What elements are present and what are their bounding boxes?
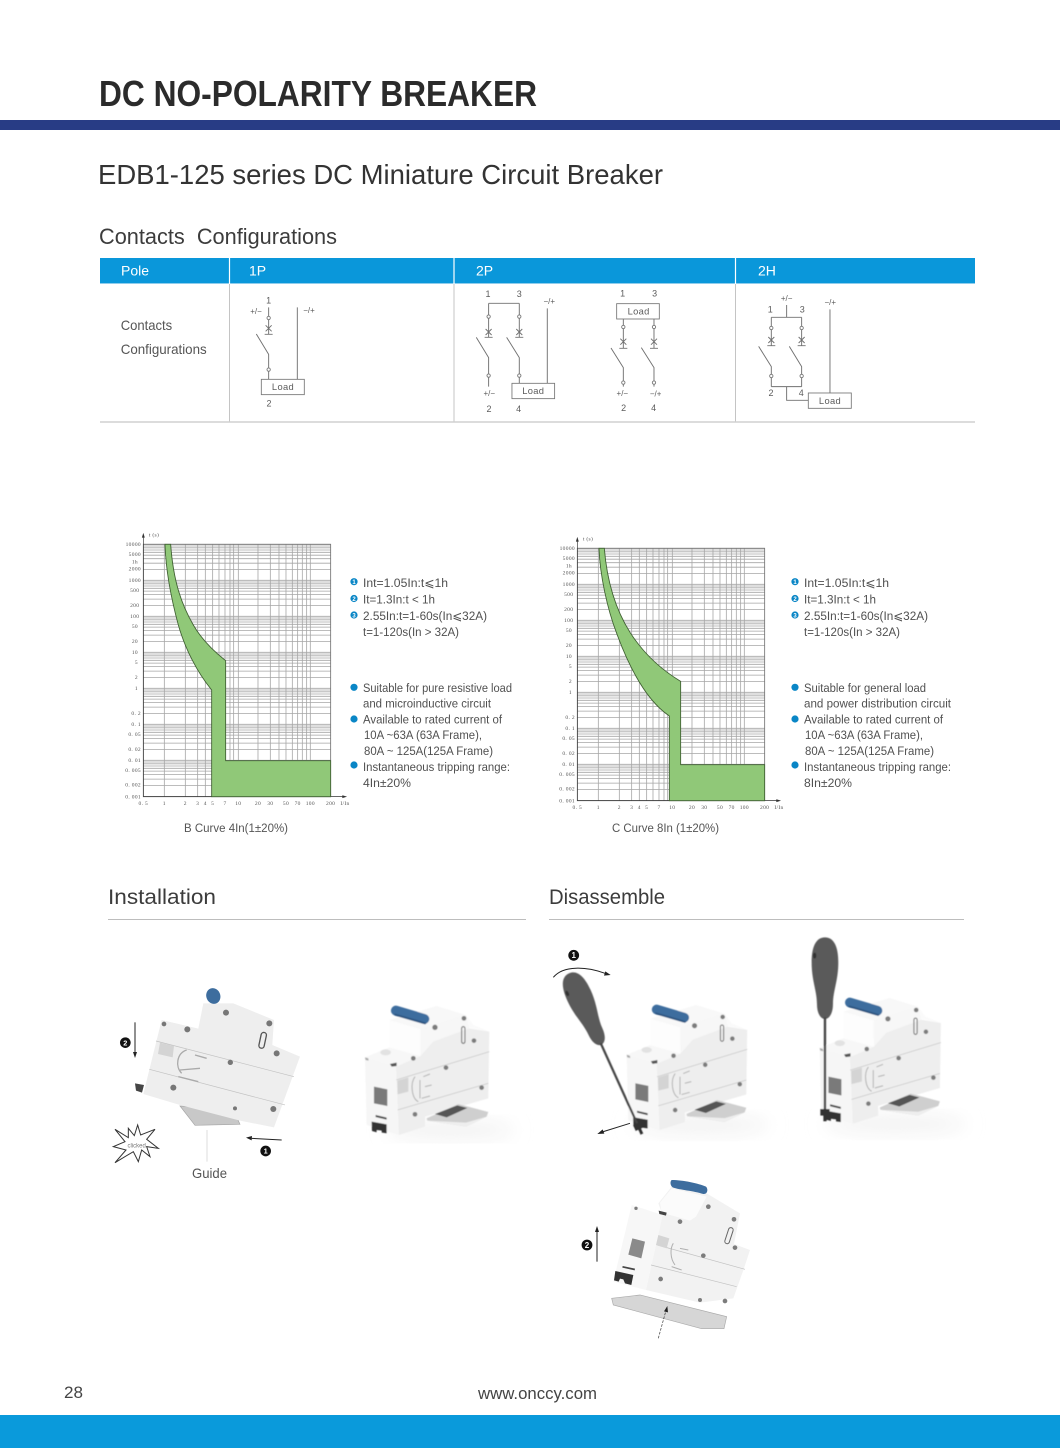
row label: Contacts [121, 317, 172, 333]
illustration: disassemble step 2, lifting breaker off rail [582, 1180, 750, 1338]
footer band [0, 1415, 1060, 1448]
illustration: installed breaker [365, 1006, 515, 1140]
caption: B curve: B Curve 4In(1±20%) [184, 821, 288, 835]
text block: B curve tripping characteristics: 1 [352, 580, 356, 586]
marker: step 1: 1 [264, 1147, 268, 1156]
diagram: 2H: 2 [768, 388, 773, 398]
heading: installation: Installation [108, 886, 216, 909]
diagram: 2P load above: 2 [621, 403, 626, 413]
text block: B curve features [350, 681, 512, 790]
text block: C curve features: 10A ~63A (63A Frame), [805, 728, 923, 742]
arrow: lift up [595, 1226, 599, 1262]
diagram: 2P load above: +/− [617, 389, 628, 398]
icon: clicked burst: clicked [128, 1143, 146, 1149]
arrow: step 2 down [133, 1022, 137, 1058]
website: www.onccy.com [477, 1384, 597, 1403]
text block: B curve tripping characteristics: 2.55In:t=1-60s(In⩽32A) [363, 609, 487, 623]
marker: step 2: 2 [123, 1038, 127, 1047]
diagram: 2P load above: Load [628, 306, 650, 316]
text block: B curve features: Available to rated current of [363, 712, 503, 726]
table header row: 2H [758, 262, 776, 278]
illustration: disassemble step 1, screwdriver levering clip [553, 950, 770, 1139]
diagram: 2P load below: 2 [486, 404, 491, 414]
diagram: 2H: +/− [781, 294, 793, 303]
diagram: 2P load above: 1 [620, 288, 625, 298]
diagram: 2H [759, 294, 851, 408]
arrow: screwdriver rotation [553, 968, 611, 977]
diagram: 2P load above: 3 [652, 288, 657, 298]
diagram: 1P: +/− [250, 307, 262, 316]
text block: C curve tripping characteristics: t=1-120s(In > 32A) [804, 625, 900, 639]
marker: disassemble step 2: 2 [585, 1241, 590, 1250]
text block: B curve features: Instantaneous tripping range: [363, 760, 510, 774]
diagram: 1P: 2 [266, 399, 271, 409]
diagram: 2P load above: −/+ [650, 389, 662, 398]
text block: B curve tripping characteristics: 2 [352, 597, 356, 603]
diagram: 2H: 3 [800, 304, 805, 314]
chart: C curve [559, 536, 784, 811]
text block: C curve tripping characteristics: 2.55In:t=1-60s(In⩽32A) [804, 609, 928, 623]
marker: step 2 [120, 1037, 131, 1048]
text block: B curve features: Suitable for pure resistive load [363, 681, 512, 695]
diagram: 2P load below: 1 [485, 289, 490, 299]
text block: C curve features: 8In±20% [804, 776, 852, 790]
text block: C curve tripping characteristics: 2 [793, 597, 797, 603]
diagram: 1P: −/+ [303, 306, 315, 315]
diagram: 1P: 1 [266, 296, 271, 306]
text block: C curve tripping characteristics: 1 [793, 580, 797, 586]
section heading: contacts configurations: Contacts Configurations [99, 224, 337, 249]
diagram: 2P load below: 4 [516, 404, 521, 414]
text block: C curve features: Available to rated current of [804, 712, 944, 726]
heading: disassemble: Disassemble [549, 886, 665, 909]
text block: C curve tripping characteristics: 3 [793, 613, 797, 619]
text block: B curve tripping characteristics: 3 [352, 613, 356, 619]
text block: C curve tripping characteristics [791, 576, 928, 639]
diagram: 1P [250, 296, 315, 409]
marker: disassemble step 1 [568, 950, 579, 961]
panel: contacts configurations table [100, 258, 975, 422]
diagram: 2H: Load [819, 396, 841, 406]
row label [121, 317, 207, 357]
row label: Configurations [121, 341, 207, 357]
diagram: 2H: 1 [768, 304, 773, 314]
text block: C curve features: Instantaneous tripping range: [804, 760, 951, 774]
text block: C curve features: 80A ~ 125A(125A Frame) [805, 744, 934, 758]
diagram: 2P load below: +/− [484, 389, 495, 398]
top rule [0, 120, 1060, 130]
text block: B curve features: 10A ~63A (63A Frame), [364, 728, 482, 742]
table header row: 1P [249, 262, 266, 278]
arrow: clip pull [597, 1123, 630, 1134]
text block: B curve features: 80A ~ 125A(125A Frame) [364, 744, 493, 758]
diagram: 2P load below: Load [522, 386, 544, 396]
marker: disassemble step 1: 1 [571, 951, 576, 960]
icon: clicked burst [113, 1125, 158, 1163]
arrow: step 1 left [246, 1136, 282, 1140]
text block: B curve features: and microinductive circuit [363, 696, 492, 710]
arrow: dashed rail pointer [658, 1306, 668, 1338]
table header row: Pole [121, 262, 149, 278]
text block: C curve features [791, 681, 952, 790]
text block: C curve features: and power distribution circuit [804, 696, 952, 710]
text block: B curve features: 4In±20% [363, 776, 411, 790]
illustration: disassemble, screwdriver upright [812, 937, 967, 1134]
diagram: 2H: 4 [799, 388, 804, 398]
text block: B curve tripping characteristics: t=1-120s(In > 32A) [363, 625, 459, 639]
table header row [100, 258, 975, 284]
text block: B curve tripping characteristics: It=1.3In:t < 1h [363, 592, 435, 606]
illustration: installation step, tilted breaker on guide [113, 986, 300, 1163]
text block: C curve features: Suitable for general load [804, 681, 926, 695]
chart: B curve [125, 532, 350, 807]
text block: C curve tripping characteristics: It=1.3In:t < 1h [804, 592, 876, 606]
marker: step 1 [260, 1146, 271, 1156]
diagram: 2P load above: 4 [651, 403, 656, 413]
text block: C curve tripping characteristics: Int=1.05In:t⩽1h [804, 576, 889, 590]
page title: DC NO-POLARITY BREAKER [99, 73, 537, 114]
label: guide: Guide [192, 1165, 227, 1181]
product subtitle: EDB1-125 series DC Miniature Circuit Breaker [98, 159, 663, 190]
table header row: 2P [476, 262, 493, 278]
diagram: 2P load below [476, 289, 555, 414]
marker: disassemble step 2 [582, 1240, 592, 1250]
page number: 28 [64, 1383, 83, 1402]
text block: B curve tripping characteristics [350, 576, 487, 639]
diagram: 2H: −/+ [825, 298, 836, 307]
caption: C curve: C Curve 8In (1±20%) [612, 821, 719, 835]
diagram: 2P load below: 3 [517, 289, 522, 299]
diagram: 1P: Load [272, 382, 294, 392]
diagram: 2P load below: −/+ [544, 297, 555, 306]
text block: B curve tripping characteristics: Int=1.05In:t⩽1h [363, 576, 448, 590]
diagram: 2P load above [611, 288, 662, 413]
